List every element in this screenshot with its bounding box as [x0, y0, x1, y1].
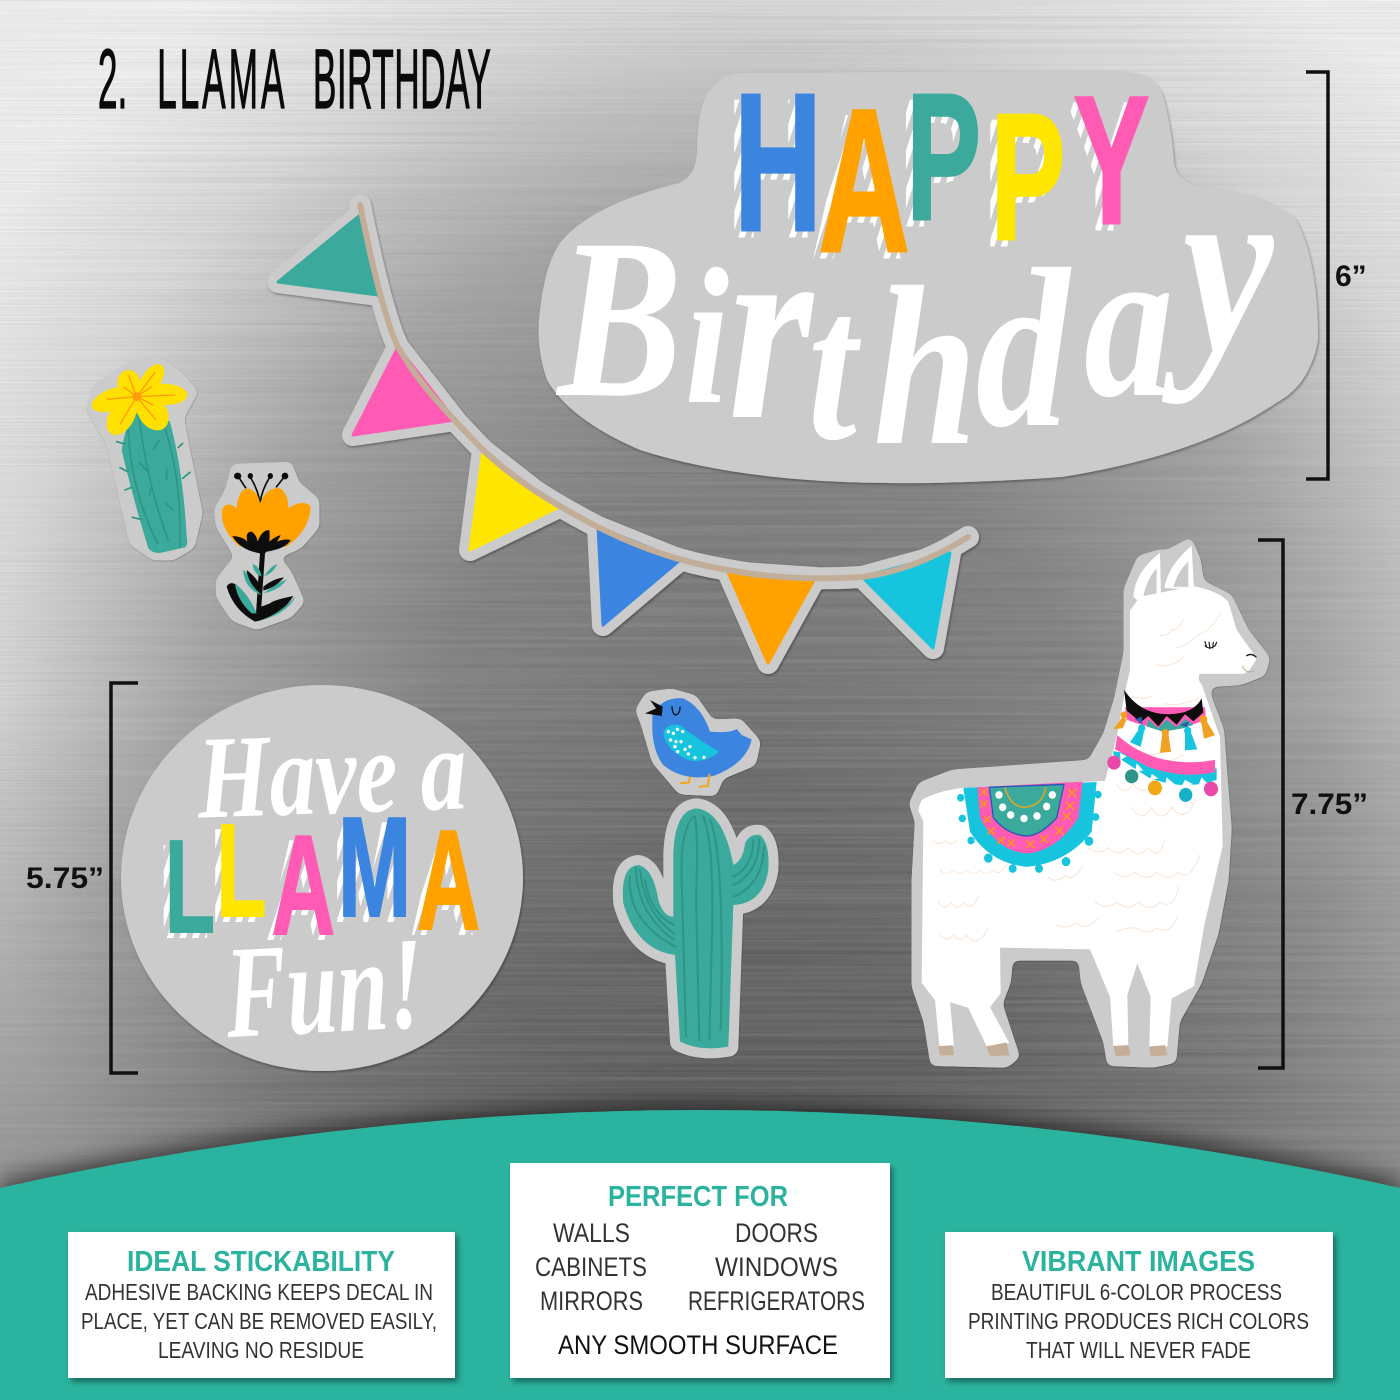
- dimension: 5.75 inches: [26, 683, 138, 1073]
- bunting flags: [278, 215, 950, 663]
- heading: Birthday: a: [1084, 201, 1173, 443]
- llama ears: [1133, 546, 1194, 603]
- sticker: bunting: [278, 205, 968, 663]
- text: LLAMA: L: [216, 798, 266, 945]
- heading: HAPPY: P: [991, 76, 1065, 277]
- heading: Birthday: r: [728, 182, 815, 475]
- text: Fun!: Fun!: [221, 909, 427, 1066]
- sticker: happy birthday: [539, 52, 1318, 493]
- sticker: llama: [911, 541, 1268, 1065]
- text: LLAMA hatched shadow: M: [332, 794, 405, 952]
- text: LLAMA hatched shadow: L: [159, 819, 209, 966]
- flower sepals and stem: [227, 530, 293, 622]
- panel: perfect for: WALLS: [553, 1218, 630, 1248]
- cactus backing: [623, 808, 769, 1048]
- llama fleece squiggles: [933, 614, 1220, 941]
- heading: HAPPY hatched shadow: A: [811, 72, 903, 300]
- heading: HAPPY: P: [906, 56, 981, 257]
- necklace pom poms: [1107, 756, 1218, 802]
- necklace tassels: [1113, 711, 1215, 753]
- cactus body: [122, 408, 187, 553]
- heading: HAPPY: A: [818, 66, 910, 294]
- panel: perfect for: MIRRORS: [540, 1286, 643, 1316]
- panel: ideal stickability: LEAVING NO RESIDUE: [158, 1337, 364, 1363]
- panel: perfect for: ANY SMOOTH SURFACE: [558, 1330, 838, 1360]
- llama first necklace: [1113, 690, 1215, 753]
- bird backing: [637, 691, 759, 794]
- title: 2.: [98, 32, 127, 126]
- text: LLAMA: L: [165, 814, 215, 961]
- leaf blacks: [247, 570, 284, 593]
- sticker backing cloud: [539, 71, 1318, 483]
- cactus ribs: [630, 817, 764, 1040]
- llama backing: [911, 541, 1268, 1065]
- panel: vibrant images: BEAUTIFUL 6-COLOR PROCESS: [991, 1279, 1282, 1305]
- panel: vibrant images: [945, 1232, 1333, 1378]
- flower stamens: [107, 372, 175, 424]
- bird legs: [681, 775, 709, 787]
- flower leaves: [235, 564, 295, 622]
- panel: ideal stickability: IDEAL STICKABILITY: [127, 1246, 395, 1278]
- llama hooves: [938, 1042, 1167, 1056]
- bunting backing: [278, 205, 968, 663]
- llama blanket: [957, 782, 1102, 873]
- panel: perfect for: [510, 1163, 890, 1378]
- flower backing: [216, 464, 317, 628]
- sticker: orange flower: [216, 464, 317, 628]
- wing dots: [667, 728, 706, 759]
- sticker: flowering cactus: [88, 358, 201, 558]
- llama second necklace: [1113, 735, 1217, 786]
- panel: vibrant images: THAT WILL NEVER FADE: [1026, 1337, 1251, 1363]
- bird eye: [672, 707, 680, 715]
- panel: perfect for: PERFECT FOR: [608, 1181, 788, 1213]
- panel: ideal stickability: ADHESIVE BACKING KEEPS DECAL IN: [85, 1279, 433, 1305]
- dimension: 7.75 inches: 7.75”: [1291, 788, 1368, 821]
- heading: Birthday: d: [976, 223, 1072, 475]
- dimension: 7.75 inches: [1258, 540, 1368, 1068]
- panel: ideal stickability: [68, 1232, 455, 1378]
- flower stamens: [238, 476, 285, 503]
- llama face: [1205, 642, 1256, 672]
- bird wing: [663, 725, 719, 761]
- panel: perfect for: WINDOWS: [715, 1252, 838, 1282]
- panel: perfect for: REFRIGERATORS: [688, 1286, 865, 1316]
- cactus backing: [88, 358, 201, 558]
- flower stamen tips: [234, 473, 288, 479]
- sticker: bird: [637, 691, 759, 794]
- heading: Birthday: t: [808, 247, 862, 485]
- panel: vibrant images: VIBRANT IMAGES: [1022, 1246, 1255, 1278]
- heading: Birthday: h: [873, 241, 977, 493]
- text: LLAMA: A: [417, 802, 480, 960]
- llama body: [918, 586, 1257, 1047]
- text: LLAMA hatched shadow: A: [411, 807, 474, 965]
- title: BIRTHDAY: [313, 32, 491, 126]
- text: Have a: Have a: [194, 703, 469, 844]
- heading: HAPPY hatched shadow: Y: [1067, 66, 1142, 269]
- bird body: [652, 698, 752, 777]
- heading: HAPPY hatched shadow: H: [727, 58, 815, 278]
- heading: Birthday: i: [685, 228, 729, 445]
- heading: Birthday: y: [1162, 128, 1275, 405]
- text: LLAMA hatched shadow: L: [210, 803, 260, 950]
- dimension: 6 inches: [1306, 72, 1367, 479]
- panel: perfect for: DOORS: [735, 1218, 818, 1248]
- dimension: 6 inches: 6”: [1335, 260, 1367, 293]
- heading: HAPPY: Y: [1074, 60, 1149, 263]
- text: LLAMA: M: [338, 789, 411, 947]
- circle backing: [121, 685, 523, 1071]
- cactus fill: [623, 808, 769, 1048]
- heading: Birthday: B: [556, 193, 682, 445]
- heading: HAPPY: H: [734, 52, 822, 272]
- panel: vibrant images: PRINTING PRODUCES RICH COLORS: [968, 1308, 1309, 1334]
- title: LLAMA: [157, 32, 287, 126]
- bunting string: [360, 205, 968, 578]
- flower petals: [222, 488, 311, 547]
- sticker: large cactus: [623, 808, 769, 1048]
- heading: HAPPY hatched shadow: P: [899, 62, 974, 263]
- yellow flower: [88, 360, 188, 440]
- panel: perfect for: CABINETS: [535, 1252, 647, 1282]
- teal footer arc: [0, 1110, 1400, 1400]
- text: LLAMA: A: [272, 807, 335, 965]
- panel: ideal stickability: PLACE, YET CAN BE REMOVED EASILY,: [81, 1308, 437, 1334]
- heading: HAPPY hatched shadow: P: [984, 82, 1058, 283]
- bird beak: [645, 700, 663, 716]
- text: LLAMA hatched shadow: A: [266, 812, 329, 970]
- sticker: have a llama fun: [121, 685, 523, 1071]
- dimension: 5.75 inches: 5.75”: [26, 862, 104, 895]
- cactus ribs: [117, 412, 190, 547]
